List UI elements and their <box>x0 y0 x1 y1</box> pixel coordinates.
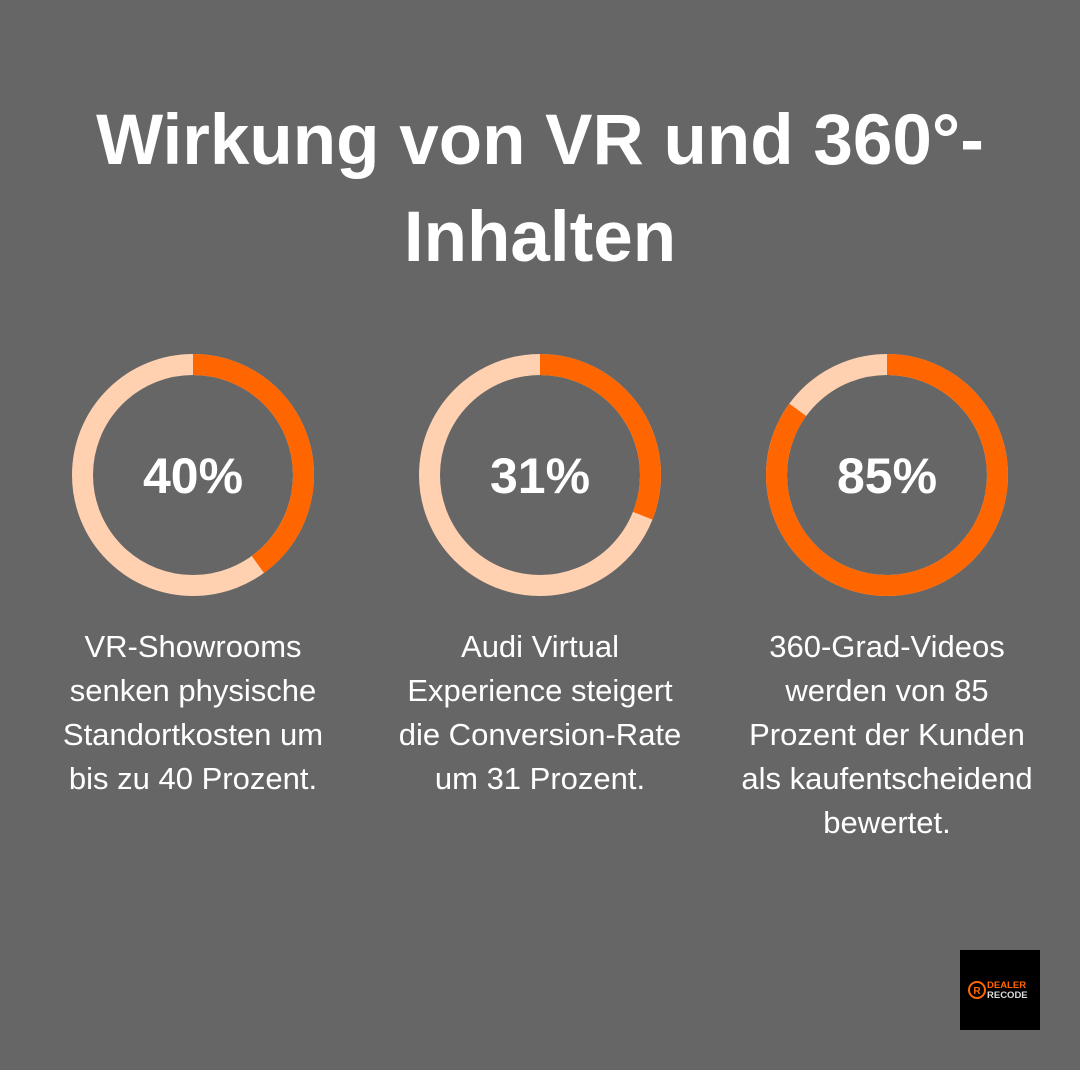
donut: 85%: 85% <box>837 448 937 504</box>
logo <box>960 950 1040 1030</box>
logo: R <box>973 986 981 997</box>
caption 1: bis zu 40 Prozent. <box>69 761 317 796</box>
caption 3: werden von 85 <box>785 673 989 708</box>
caption 1: senken physische <box>70 673 316 708</box>
title: Wirkung von VR und 360°- <box>96 101 984 180</box>
logo: DEALER <box>987 980 1026 991</box>
caption 3: Prozent der Kunden <box>749 717 1025 752</box>
caption 3: als kaufentscheidend <box>741 761 1033 796</box>
caption 3: 360-Grad-Videos <box>769 629 1005 664</box>
caption 2: Audi Virtual <box>461 629 619 664</box>
caption 2: um 31 Prozent. <box>435 761 645 796</box>
donut: 31%: 31% <box>490 448 590 504</box>
title: Inhalten <box>404 198 676 277</box>
donut: 31% <box>430 364 650 586</box>
caption 2: Experience steigert <box>407 673 673 708</box>
caption 1: Standortkosten um <box>63 717 323 752</box>
caption 2 <box>399 629 681 796</box>
donut: 40%: 40% <box>143 448 243 504</box>
donut: 40% <box>82 364 304 586</box>
title <box>96 101 984 277</box>
caption 1: VR-Showrooms <box>84 629 302 664</box>
caption 3 <box>741 629 1033 840</box>
donut: 85% <box>776 364 998 586</box>
caption 1 <box>63 629 323 796</box>
donut charts <box>72 354 1008 596</box>
caption 3: bewertet. <box>823 805 951 840</box>
caption 2: die Conversion-Rate <box>399 717 681 752</box>
logo: RECODE <box>987 990 1028 1001</box>
